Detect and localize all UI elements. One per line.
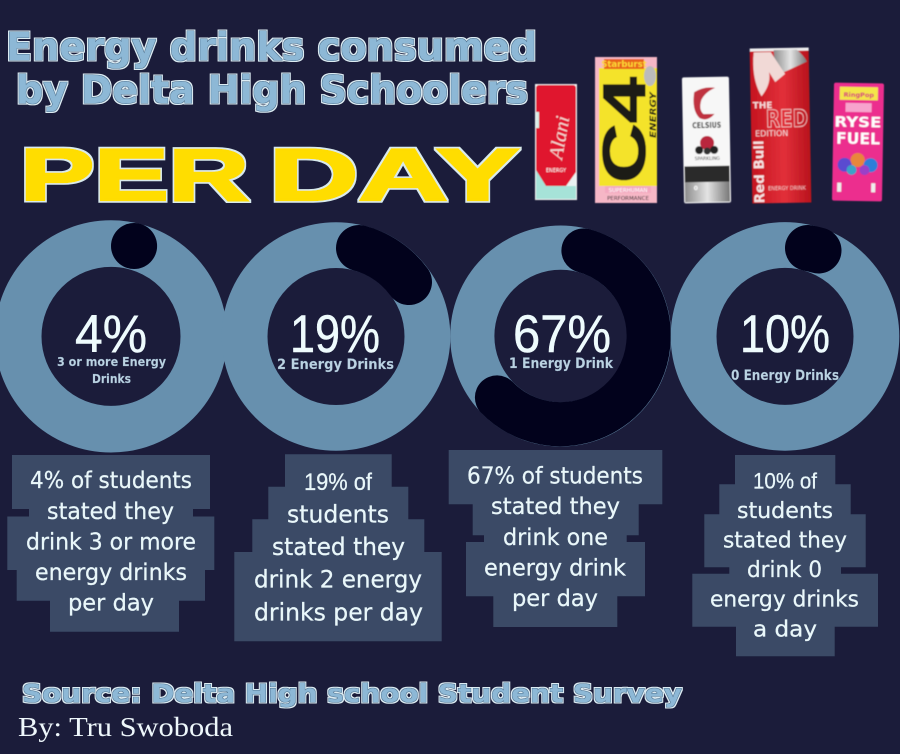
icon: Red Bull can	[750, 48, 811, 204]
text block: 10% of students: drink 0	[747, 558, 822, 583]
icon: Alani can	[535, 84, 577, 200]
text block: 10% of students: students	[737, 499, 833, 524]
donut chart: 19%	[245, 245, 427, 428]
icon: Ryse Fuel can	[832, 83, 884, 201]
text block: 19% of students: 19% of	[304, 469, 372, 496]
text block: 67% of students: 67% of students	[467, 463, 643, 489]
icon: Red Bull can: EDITION	[755, 129, 788, 138]
icon: Celsius can: 0	[694, 185, 698, 192]
text block: 4% of students: drink 3 or more	[26, 530, 196, 556]
icon: Celsius can	[682, 77, 731, 203]
text block: 4% of students: per day	[68, 590, 154, 616]
icon: Celsius can: CELSIUS	[692, 121, 721, 130]
text block: 10% of students: a day	[753, 617, 817, 642]
source line: Source: Delta High school Student Survey	[22, 679, 682, 708]
title	[6, 25, 537, 112]
label: 10%: 10%	[740, 305, 830, 364]
text block: 4% of students: stated they	[47, 499, 174, 525]
title: Energy drinks consumed	[6, 25, 537, 69]
label: 3 or more energy drinks: 3 or more Energy	[57, 354, 166, 369]
label: 0 energy drinks: 0 Energy Drinks	[731, 368, 839, 384]
icon: C4 can: ENERGY	[649, 91, 659, 138]
text block: 67% of students: drink one	[503, 525, 608, 551]
donut chart: 4%	[18, 244, 204, 429]
icon: Red Bull can: Red Bull	[752, 140, 768, 203]
text block: 67% of students	[449, 450, 662, 627]
text block: 4% of students	[7, 455, 214, 632]
text block: 19% of students: drinks per day	[254, 598, 423, 626]
label: 4%: 4%	[75, 305, 147, 364]
icon: Alani can: Alani	[545, 114, 574, 163]
text block: 10% of students: energy drinks	[710, 588, 859, 613]
donut chart: 10%	[694, 245, 876, 428]
byline: By: Tru Swoboda	[18, 712, 233, 742]
icon: Ryse Fuel can: FUEL	[836, 129, 880, 148]
heading: per day: DAY	[269, 135, 519, 216]
icon: C4 can	[591, 57, 659, 203]
label: 1 energy drink: 1 Energy Drink	[509, 356, 614, 372]
text block: 67% of students: stated they	[491, 494, 620, 520]
text block: 10% of students	[692, 455, 878, 656]
text block: 10% of students: 10% of	[753, 468, 818, 493]
icon: Red Bull can: ENERGY DRINK	[768, 186, 807, 192]
icon: Red Bull can: THE	[753, 101, 773, 111]
text block: 4% of students: energy drinks	[35, 560, 187, 586]
text block: 4% of students: 4% of students	[30, 468, 192, 494]
text block: 19% of students: stated they	[272, 533, 405, 561]
icon: Ryse Fuel can: RYSE	[834, 115, 881, 131]
icon: Celsius can: SPARKLING	[695, 156, 720, 162]
label: 2 energy drinks: 2 Energy Drinks	[277, 357, 394, 373]
text block: 67% of students: energy drink	[484, 555, 627, 581]
donut chart: 67%	[472, 248, 649, 424]
text block: 67% of students: per day	[512, 586, 598, 612]
title: by Delta High Schoolers	[16, 68, 528, 112]
text block: 19% of students: students	[287, 500, 389, 528]
icon: Red Bull can: RED	[766, 105, 808, 133]
label: 3 or more energy drinks: Drinks	[92, 371, 131, 386]
label: 19%: 19%	[290, 305, 380, 364]
text block: 10% of students: stated they	[723, 529, 847, 554]
text block: 19% of students: drink 2 energy	[254, 566, 422, 594]
icon: C4 can: C4	[591, 76, 658, 183]
heading: per day: PER	[20, 135, 249, 216]
icon: C4 can: SUPERHUMAN	[609, 188, 647, 194]
text block: 19% of students	[234, 454, 442, 641]
heading: per day	[20, 135, 519, 216]
icon: Ryse Fuel can: RingPop	[844, 91, 874, 99]
icon: Alani can: ENERGY	[546, 168, 567, 174]
icon: C4 can: PERFORMANCE	[607, 196, 649, 202]
label: 67%: 67%	[513, 305, 611, 364]
icon: C4 can: Starburst	[601, 60, 647, 70]
